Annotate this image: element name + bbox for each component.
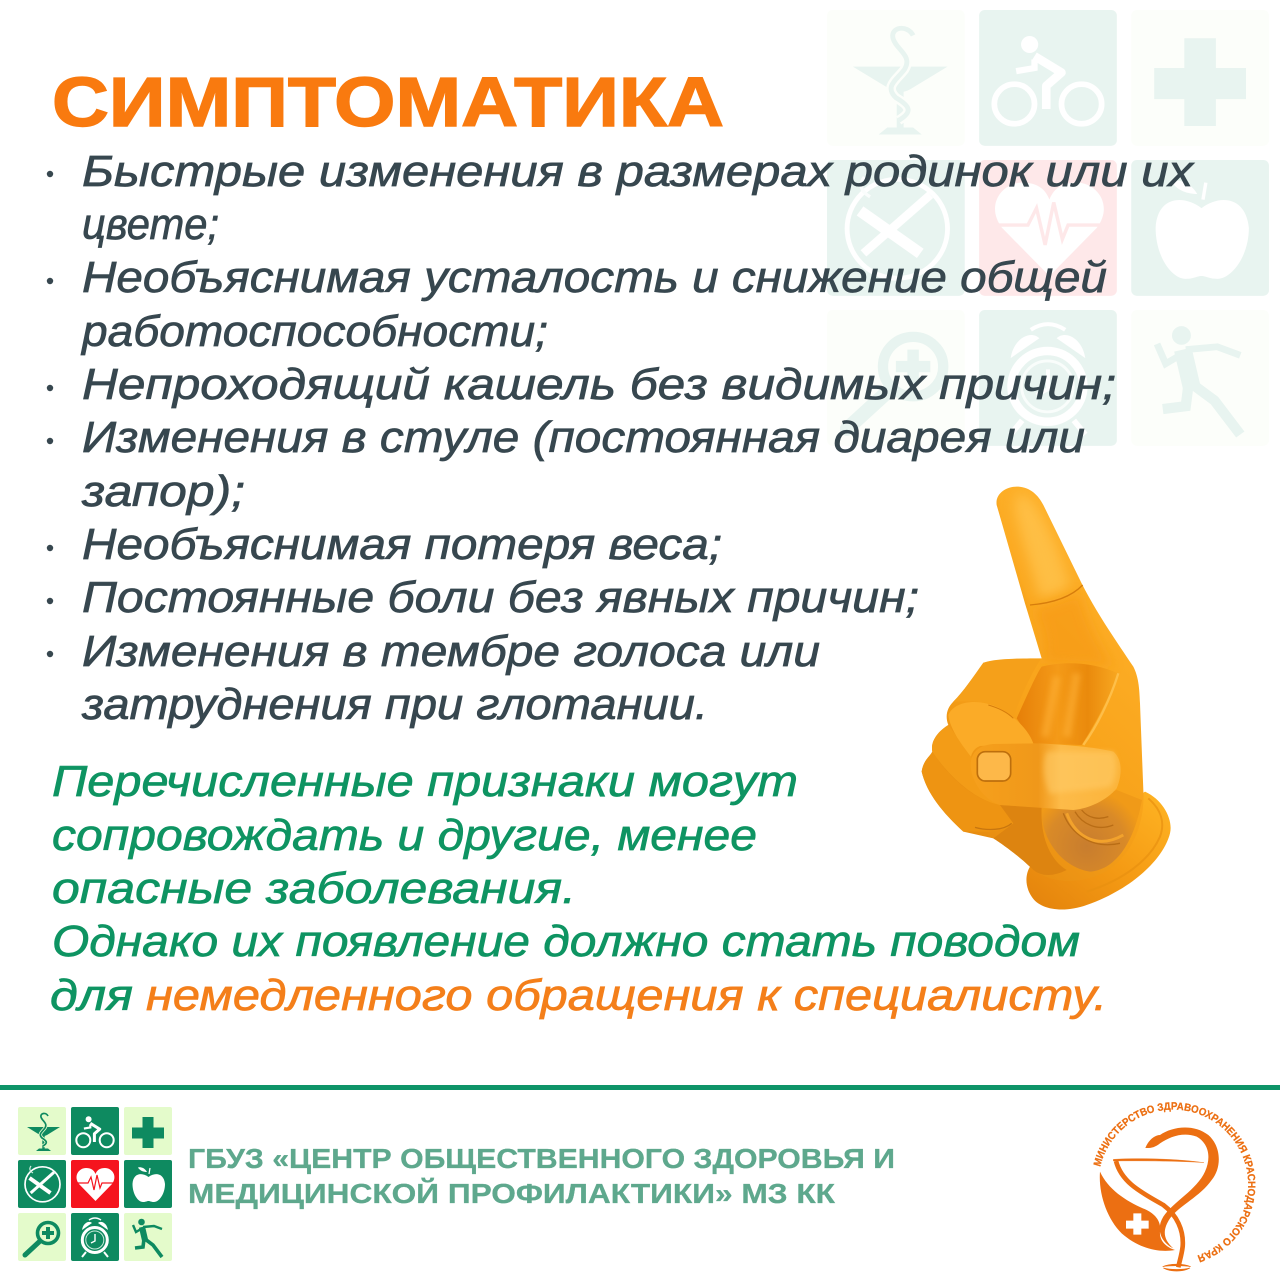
green conclusion text: немедленного обращения к специалисту. [146, 971, 1107, 1020]
icon: medical cross [124, 1107, 172, 1155]
symptom list: Необъяснимая потеря веса; [82, 520, 722, 569]
watermark: background icon grid [827, 10, 1269, 446]
green conclusion text: Однако их появление должно стать поводом [52, 917, 1080, 966]
divider line [0, 1085, 1280, 1090]
organisation name [188, 1143, 895, 1209]
symptom list: Изменения в тембре голоса или [82, 627, 820, 676]
icon: pointing hand [922, 487, 1171, 910]
icon: heart with pulse [71, 1160, 119, 1208]
icon: magnifier [18, 1213, 66, 1261]
icon: runner [124, 1213, 172, 1261]
logo: ministry emblem [1093, 1102, 1256, 1272]
organisation name: ГБУЗ «ЦЕНТР ОБЩЕСТВЕННОГО ЗДОРОВЬЯ И [188, 1143, 895, 1174]
organisation name: МЕДИЦИНСКОЙ ПРОФИЛАКТИКИ» МЗ КК [188, 1177, 836, 1209]
symptom list: Быстрые изменения в размерах родинок или их [82, 147, 1195, 196]
green conclusion text: Перечисленные признаки могут [52, 757, 798, 806]
symptom list: цвете; [82, 200, 219, 249]
icon: alarm clock [71, 1213, 119, 1261]
green conclusion text [50, 757, 1107, 1020]
symptom list: Необъяснимая усталость и снижение общей [82, 253, 1107, 302]
icon: no smoking [18, 1160, 66, 1208]
green conclusion text: для [50, 971, 133, 1020]
symptom list: Постоянные боли без явных причин; [82, 573, 919, 622]
emblem ring text: МИНИСТЕРСТВО ЗДРАВООХРАНЕНИЯ КРАСНОДАРСКОГО КРАЯ [1093, 1102, 1256, 1262]
symptom list: затруднения при глотании. [81, 680, 708, 729]
symptom list: запор); [81, 467, 245, 516]
icon: apple [124, 1160, 172, 1208]
green conclusion text: опасные заболевания. [52, 864, 576, 913]
emblem snake and bowl [1100, 1127, 1219, 1271]
green conclusion text: сопровождать и другие, менее [52, 811, 757, 860]
icon: bowl of hygieia [18, 1107, 66, 1155]
symptom list: работоспособности; [80, 307, 548, 356]
title: СИМПТОМАТИКА [52, 63, 724, 141]
icon: cyclist [71, 1107, 119, 1155]
symptom list [47, 147, 1195, 729]
logo: health icon grid [18, 1107, 172, 1261]
symptom list: Непроходящий кашель без видимых причин; [82, 360, 1116, 409]
symptom list: Изменения в стуле (постоянная диарея или [82, 413, 1085, 462]
